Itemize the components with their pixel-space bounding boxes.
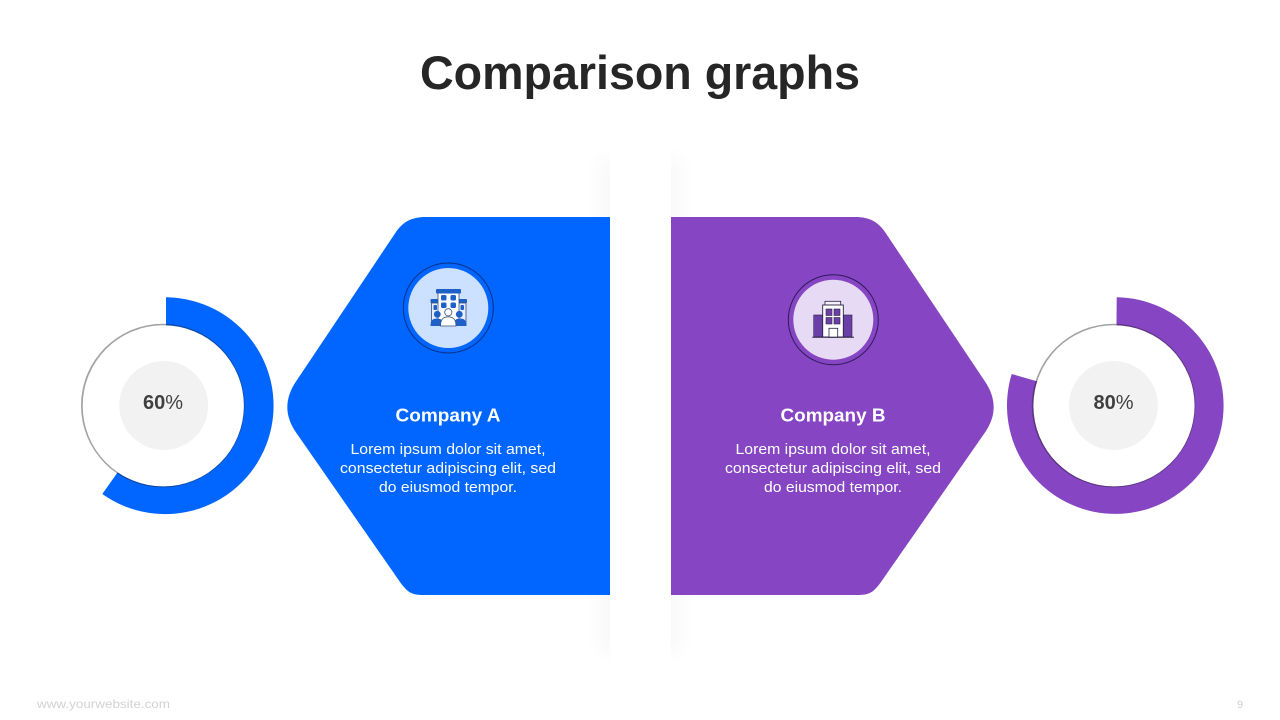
heading: company B: Company B [780, 404, 886, 426]
value: 60%: 60% [143, 392, 183, 414]
text block: company B: consectetur adipiscing elit, sed [725, 460, 941, 477]
text block: company A: do eiusmod tempor. [379, 479, 517, 496]
text block: company B: do eiusmod tempor. [764, 479, 902, 496]
title: Comparison graphs [420, 46, 860, 99]
panel: company B [671, 217, 994, 595]
hexagon shape A [287, 217, 610, 595]
icon: office building [788, 275, 878, 365]
donut arc 60% [102, 297, 274, 514]
text block: company A [340, 441, 556, 496]
icon: office building with people [403, 263, 493, 353]
inner white disc [81, 324, 245, 487]
text block: company A: consectetur adipiscing elit, sed [340, 460, 556, 477]
page number: 9 [1237, 699, 1243, 711]
value backdrop [1069, 361, 1158, 450]
center divider with soft shadow [598, 140, 683, 670]
value backdrop [119, 361, 208, 450]
inner white disc [1032, 324, 1195, 487]
text block: company B [725, 441, 941, 496]
text block: company B: Lorem ipsum dolor sit amet, [736, 441, 930, 458]
hexagon shape B [671, 217, 994, 595]
heading: company A: Company A [396, 404, 500, 426]
panel: company A [287, 217, 610, 595]
text block: company A: Lorem ipsum dolor sit amet, [350, 441, 546, 458]
value: 80%: 80% [1093, 392, 1134, 414]
chart: 60% donut [81, 297, 274, 514]
footer website: www.yourwebsite.com [36, 697, 170, 711]
donut arc 80% [1007, 297, 1224, 514]
chart: 80% donut [1007, 297, 1224, 514]
